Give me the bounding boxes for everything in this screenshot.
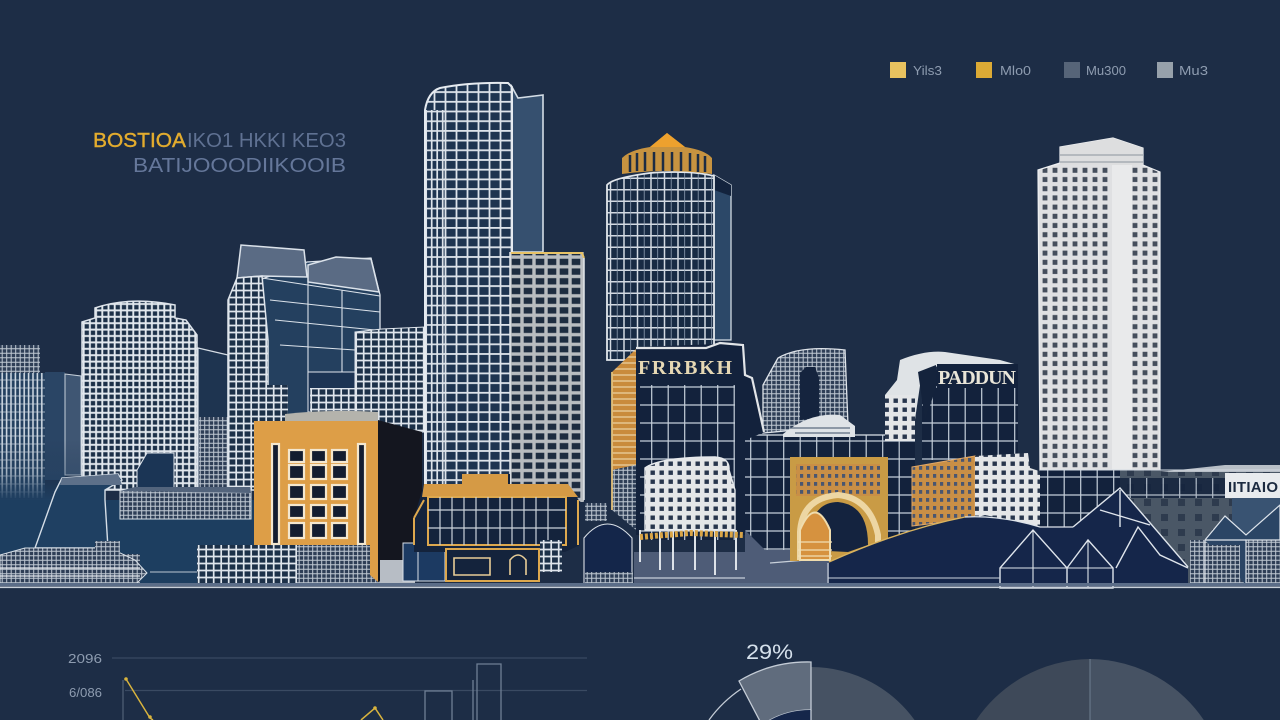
- ground line: [0, 583, 1280, 588]
- tall central tower: [425, 83, 543, 490]
- title text: BOSTIOA: [93, 130, 187, 152]
- right sign: IITIAIO: [1228, 479, 1278, 496]
- bar and line chart: [68, 651, 587, 720]
- left round tower: [82, 301, 228, 490]
- gold-trim low pavilion: [414, 474, 580, 581]
- orange-white mid block: [912, 453, 1042, 527]
- grey plinth: [634, 530, 830, 585]
- legend: Mlo0: [1000, 63, 1031, 78]
- orange and dark corporate building: [612, 343, 765, 540]
- title text: BATIJOOODIIKOOIB: [133, 155, 346, 177]
- right glass strip: [1040, 465, 1280, 585]
- low white grid block: [150, 545, 382, 585]
- legend: Mu300: [1086, 63, 1126, 78]
- gold arch building: [790, 457, 888, 561]
- tall white tower: [1038, 138, 1160, 470]
- left glass towers: [228, 245, 425, 490]
- office windows: [272, 444, 365, 544]
- orange office block: [254, 411, 422, 583]
- legend: Yils3: [913, 63, 942, 78]
- building sign: FRRBKH: [638, 357, 732, 379]
- pie chart right: [973, 659, 1207, 720]
- pie chart left: 29%: [746, 641, 793, 664]
- white and dark block with sign: [885, 352, 1018, 460]
- cylinder tower with gold crown: [607, 133, 731, 360]
- legend: Mu3: [1179, 63, 1208, 78]
- title text: [93, 130, 346, 177]
- blue panel over left low section: [0, 474, 260, 585]
- ferry: [0, 541, 147, 585]
- white annex with gold rail: [640, 457, 743, 575]
- navy hill with tents: [828, 488, 1188, 588]
- pie chart left: [709, 641, 918, 720]
- dark glass mid block: [745, 435, 915, 570]
- legend: [890, 62, 1208, 78]
- title text: IKO1 HKKI KEO3: [187, 130, 346, 152]
- far left buildings: [0, 345, 82, 500]
- gothic grey tower: [763, 349, 855, 437]
- bar and line chart: 6/086: [69, 685, 102, 700]
- tents bottom strip centre left: [380, 543, 445, 585]
- right small houses: [1190, 505, 1280, 585]
- bar and line chart: 2096: [68, 651, 102, 666]
- skyline illustration: [0, 83, 1280, 588]
- block sign: PADDUN: [938, 367, 1017, 389]
- tan tower: [510, 252, 584, 502]
- navy dome: [584, 503, 633, 585]
